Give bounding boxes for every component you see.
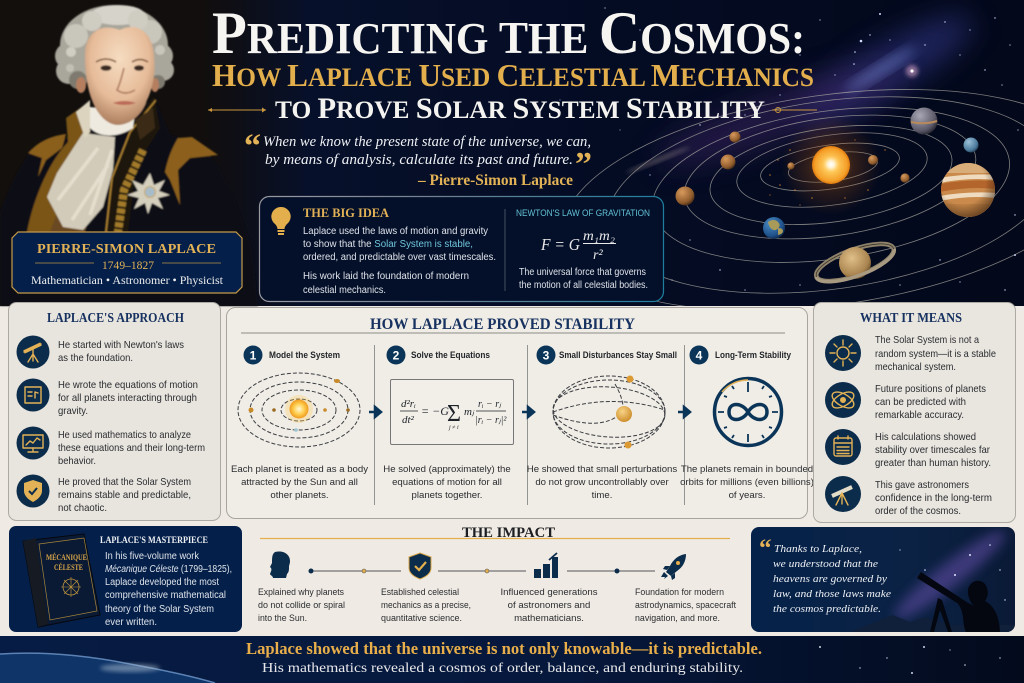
panel: Laplace's masterpiece: Mécanique Céleste (1799–1825), bbox=[105, 564, 232, 575]
body: celestial mechanics. bbox=[303, 285, 386, 296]
portrait of Laplace bbox=[0, 5, 258, 306]
face bbox=[85, 27, 155, 125]
panel: how Laplace proved stability bbox=[226, 308, 814, 518]
step 2: equations of motion for all bbox=[392, 477, 502, 488]
equation box: rᵢ − rⱼ bbox=[478, 399, 502, 410]
ornament right bbox=[772, 108, 817, 112]
item: head: into the Sun. bbox=[258, 613, 307, 624]
step: shield: not chaotic. bbox=[58, 503, 107, 514]
item: shield bbox=[381, 553, 471, 624]
ornament left bbox=[208, 108, 266, 112]
Newton's law: the motion of all celestial bodies. bbox=[519, 280, 648, 291]
step 1 bbox=[231, 346, 368, 501]
step: shield: remains stable and predictable, bbox=[58, 490, 191, 501]
step 3: He showed that small perturbations bbox=[527, 464, 677, 475]
panel: closing quote: heavens are governed by bbox=[773, 573, 887, 585]
item: calendar: greater than human history. bbox=[875, 458, 991, 469]
icon: book: MÉCANIQUE bbox=[46, 552, 87, 562]
heading: LAPLACE'S APPROACH bbox=[47, 310, 184, 325]
Newton's law: m₁m₂ bbox=[583, 229, 615, 244]
name plaque: Mathematician • Astronomer • Physicist bbox=[31, 275, 224, 287]
title bbox=[212, 0, 814, 125]
step: equations: for all planets interacting through bbox=[58, 393, 197, 404]
item: atom bbox=[825, 382, 986, 421]
footer banner bbox=[0, 636, 1024, 683]
panel: what it means bbox=[814, 302, 1016, 522]
quote bbox=[244, 128, 592, 189]
left gold lapel bbox=[27, 104, 90, 232]
step: equations bbox=[16, 378, 198, 417]
item: telescope: confidence in the long-term bbox=[875, 493, 992, 504]
step 4 bbox=[680, 346, 814, 501]
item: calendar: stability over timescales far bbox=[875, 445, 991, 456]
item: atom: can be predicted with bbox=[875, 397, 966, 408]
icon: light bulb bbox=[271, 207, 291, 235]
Newton's law: F = G bbox=[540, 235, 580, 254]
diagram: solar model bbox=[238, 373, 360, 447]
planets bbox=[676, 108, 996, 239]
Newton's law bbox=[516, 208, 650, 291]
heading: THE IMPACT bbox=[462, 525, 555, 541]
step: equations: He wrote the equations of motion bbox=[58, 380, 198, 391]
lace cravat bbox=[47, 133, 115, 230]
item: calendar bbox=[825, 429, 991, 469]
icon: infinity clock bbox=[714, 378, 782, 446]
step: monitor bbox=[16, 426, 205, 467]
step 3: Small Disturbances Stay Small bbox=[559, 350, 677, 361]
step 3 bbox=[527, 346, 677, 501]
item: sun bbox=[825, 335, 996, 373]
title line 1: PREDICTING THE COSMOS: bbox=[212, 0, 805, 66]
arrow 1 bbox=[369, 407, 381, 417]
title line 2: HOW LAPLACE USED CELESTIAL MECHANICS bbox=[212, 57, 814, 93]
step 1: attracted by the Sun and all bbox=[241, 477, 358, 488]
earth horizon bbox=[0, 653, 215, 683]
header band bbox=[0, 0, 1024, 306]
step 2: He solved (approximately) the bbox=[383, 464, 511, 475]
equation box: d²rᵢ bbox=[401, 398, 416, 410]
step 3: do not grow uncontrollably over bbox=[535, 477, 669, 488]
item: bar chart: Influenced generations bbox=[500, 587, 598, 598]
panel: closing quote bbox=[751, 522, 1015, 632]
equation box: = −G bbox=[421, 404, 449, 418]
icon: book: CÉLESTE bbox=[54, 562, 83, 572]
item: head: Explained why planets bbox=[258, 587, 344, 598]
quote marks open: “ bbox=[244, 128, 261, 165]
body: ordered, and predictable over vast timescales. bbox=[303, 252, 496, 263]
equation box: mⱼ bbox=[464, 406, 475, 418]
quote: by means of analysis, calculate its past and future. bbox=[265, 152, 573, 168]
ears bbox=[76, 77, 86, 93]
panel: Laplace's approach bbox=[8, 302, 220, 520]
quote: When we know the present state of the universe, we can, bbox=[263, 134, 591, 150]
section: the impact bbox=[258, 525, 736, 624]
Newton's law: The universal force that governs bbox=[519, 267, 646, 278]
step 2 bbox=[383, 346, 514, 501]
item: sun: The Solar System is not a bbox=[875, 335, 979, 346]
step: monitor: He used mathematics to analyze bbox=[58, 430, 191, 441]
Newton's law: NEWTON'S LAW OF GRAVITATION bbox=[516, 208, 650, 218]
item: telescope: This gave astronomers bbox=[875, 480, 969, 491]
white collar and cravat bbox=[90, 107, 135, 136]
equation box bbox=[390, 380, 514, 444]
step 2: planets together. bbox=[412, 490, 482, 501]
panel: the big idea bbox=[260, 196, 664, 302]
item: atom: Future positions of planets bbox=[875, 384, 986, 395]
footer stars bbox=[819, 646, 1001, 674]
item: rocket: navigation, and more. bbox=[635, 613, 720, 624]
panel: Laplace's masterpiece: theory of the Solar System bbox=[105, 604, 214, 615]
item: shield: mechanics as a precise, bbox=[381, 600, 471, 611]
item: shield: quantitative science. bbox=[381, 613, 462, 624]
panel: Laplace's masterpiece: LAPLACE'S MASTERPIECE bbox=[100, 535, 208, 545]
panel: Laplace's masterpiece: comprehensive mathematical bbox=[105, 590, 226, 601]
item: head: do not collide or spiral bbox=[258, 600, 345, 611]
item: sun: mechanical system. bbox=[875, 362, 956, 373]
heading: WHAT IT MEANS bbox=[860, 310, 962, 325]
body bbox=[303, 226, 496, 296]
hair bbox=[55, 5, 174, 89]
item: shield: Established celestial bbox=[381, 587, 459, 598]
step 4: Long-Term Stability bbox=[715, 350, 792, 361]
diagram: perturbed orbits bbox=[551, 376, 667, 448]
panel: closing quote: the cosmos predictable. bbox=[773, 603, 881, 615]
step 4: orbits for millions (even billions) bbox=[680, 477, 814, 488]
step 3: 3 bbox=[543, 348, 550, 362]
panel: Laplace's masterpiece bbox=[9, 526, 242, 632]
step: equations: gravity. bbox=[58, 406, 88, 417]
item: calendar: His calculations showed bbox=[875, 432, 976, 443]
step 4: The planets remain in bounded bbox=[681, 464, 813, 475]
heading: HOW LAPLACE PROVED STABILITY bbox=[370, 316, 635, 333]
name plaque: PIERRE-SIMON LAPLACE bbox=[37, 242, 216, 257]
right epaulet bbox=[165, 137, 218, 205]
equation box: j ≠ i bbox=[448, 425, 459, 431]
step: telescope bbox=[16, 336, 184, 368]
left epaulet bbox=[28, 134, 66, 177]
quote marks close: ” bbox=[575, 146, 592, 183]
step: monitor: these equations and their long-term bbox=[58, 443, 205, 454]
step 1: other planets. bbox=[270, 490, 329, 501]
item: telescope bbox=[825, 476, 992, 517]
quote mark: “ bbox=[759, 535, 772, 562]
step 4: 4 bbox=[696, 348, 703, 362]
step: shield bbox=[16, 474, 191, 514]
mountains bbox=[850, 615, 1015, 632]
item: telescope: order of the cosmos. bbox=[875, 506, 961, 517]
step: shield: He proved that the Solar System bbox=[58, 477, 191, 488]
title line 3: TO PROVE SOLAR SYSTEM STABILITY bbox=[275, 92, 765, 125]
panel: closing quote: law, and those laws make bbox=[773, 588, 891, 600]
step 1: Each planet is treated as a body bbox=[231, 464, 368, 475]
Newton's law: r² bbox=[593, 248, 603, 263]
panel: Laplace's masterpiece: Laplace developed the most bbox=[105, 577, 219, 588]
item: rocket: astrodynamics, spacecraft bbox=[635, 600, 736, 611]
equation box: dt² bbox=[402, 414, 415, 426]
step 1: 1 bbox=[250, 348, 257, 362]
footer line 1: Laplace showed that the universe is not only knowable—it is predictable. bbox=[246, 639, 762, 658]
equation box: Σ bbox=[447, 401, 461, 427]
space illustration: nebula and stars bbox=[560, 0, 1019, 291]
item: bar chart: of astronomers and bbox=[508, 600, 590, 611]
equation box: |rᵢ − rⱼ|² bbox=[475, 415, 507, 426]
astronomer silhouette bbox=[917, 572, 1000, 632]
item: head bbox=[258, 551, 345, 624]
step 1: Model the System bbox=[269, 350, 340, 361]
footer line 2: His mathematics revealed a cosmos of order, balance, and enduring stability. bbox=[262, 661, 743, 676]
arrow 2 bbox=[522, 407, 534, 417]
body: to show that the Solar System is stable, bbox=[303, 239, 473, 250]
sun bbox=[769, 115, 886, 215]
medal star bbox=[127, 173, 170, 214]
icon: book bbox=[23, 534, 100, 627]
step: telescope: as the foundation. bbox=[58, 353, 133, 364]
step: monitor: behavior. bbox=[58, 456, 96, 467]
item: rocket bbox=[635, 554, 736, 624]
panel: Laplace's masterpiece: ever written. bbox=[105, 617, 157, 628]
body: Laplace used the laws of motion and gravity bbox=[303, 226, 488, 237]
panel: closing quote: Thanks to Laplace, bbox=[774, 543, 862, 555]
step 3: time. bbox=[592, 490, 612, 501]
arrow 3 bbox=[678, 407, 690, 417]
step 2: Solve the Equations bbox=[411, 350, 490, 361]
item: atom: remarkable accuracy. bbox=[875, 410, 964, 421]
item: rocket: Foundation for modern bbox=[635, 587, 724, 598]
body: His work laid the foundation of modern bbox=[303, 271, 469, 282]
coat bbox=[0, 100, 258, 306]
name plaque bbox=[12, 232, 242, 293]
orbits bbox=[576, 89, 1024, 306]
step: telescope: He started with Newton's laws bbox=[58, 340, 184, 351]
panel: Laplace's masterpiece: In his five-volume work bbox=[105, 551, 200, 562]
right embroidered lapel bbox=[106, 96, 160, 232]
heading: THE BIG IDEA bbox=[303, 206, 389, 220]
item: bar chart: mathematicians. bbox=[514, 613, 584, 624]
planet: Saturn bbox=[812, 236, 898, 289]
step 2: 2 bbox=[393, 348, 400, 362]
attribution: – Pierre-Simon Laplace bbox=[417, 172, 573, 189]
name plaque: 1749–1827 bbox=[102, 258, 154, 272]
panel: closing quote: we understood that the bbox=[773, 558, 878, 570]
step 4: of years. bbox=[729, 490, 765, 501]
item: sun: random system—it is a stable bbox=[875, 349, 996, 360]
item: bar chart bbox=[500, 553, 598, 624]
